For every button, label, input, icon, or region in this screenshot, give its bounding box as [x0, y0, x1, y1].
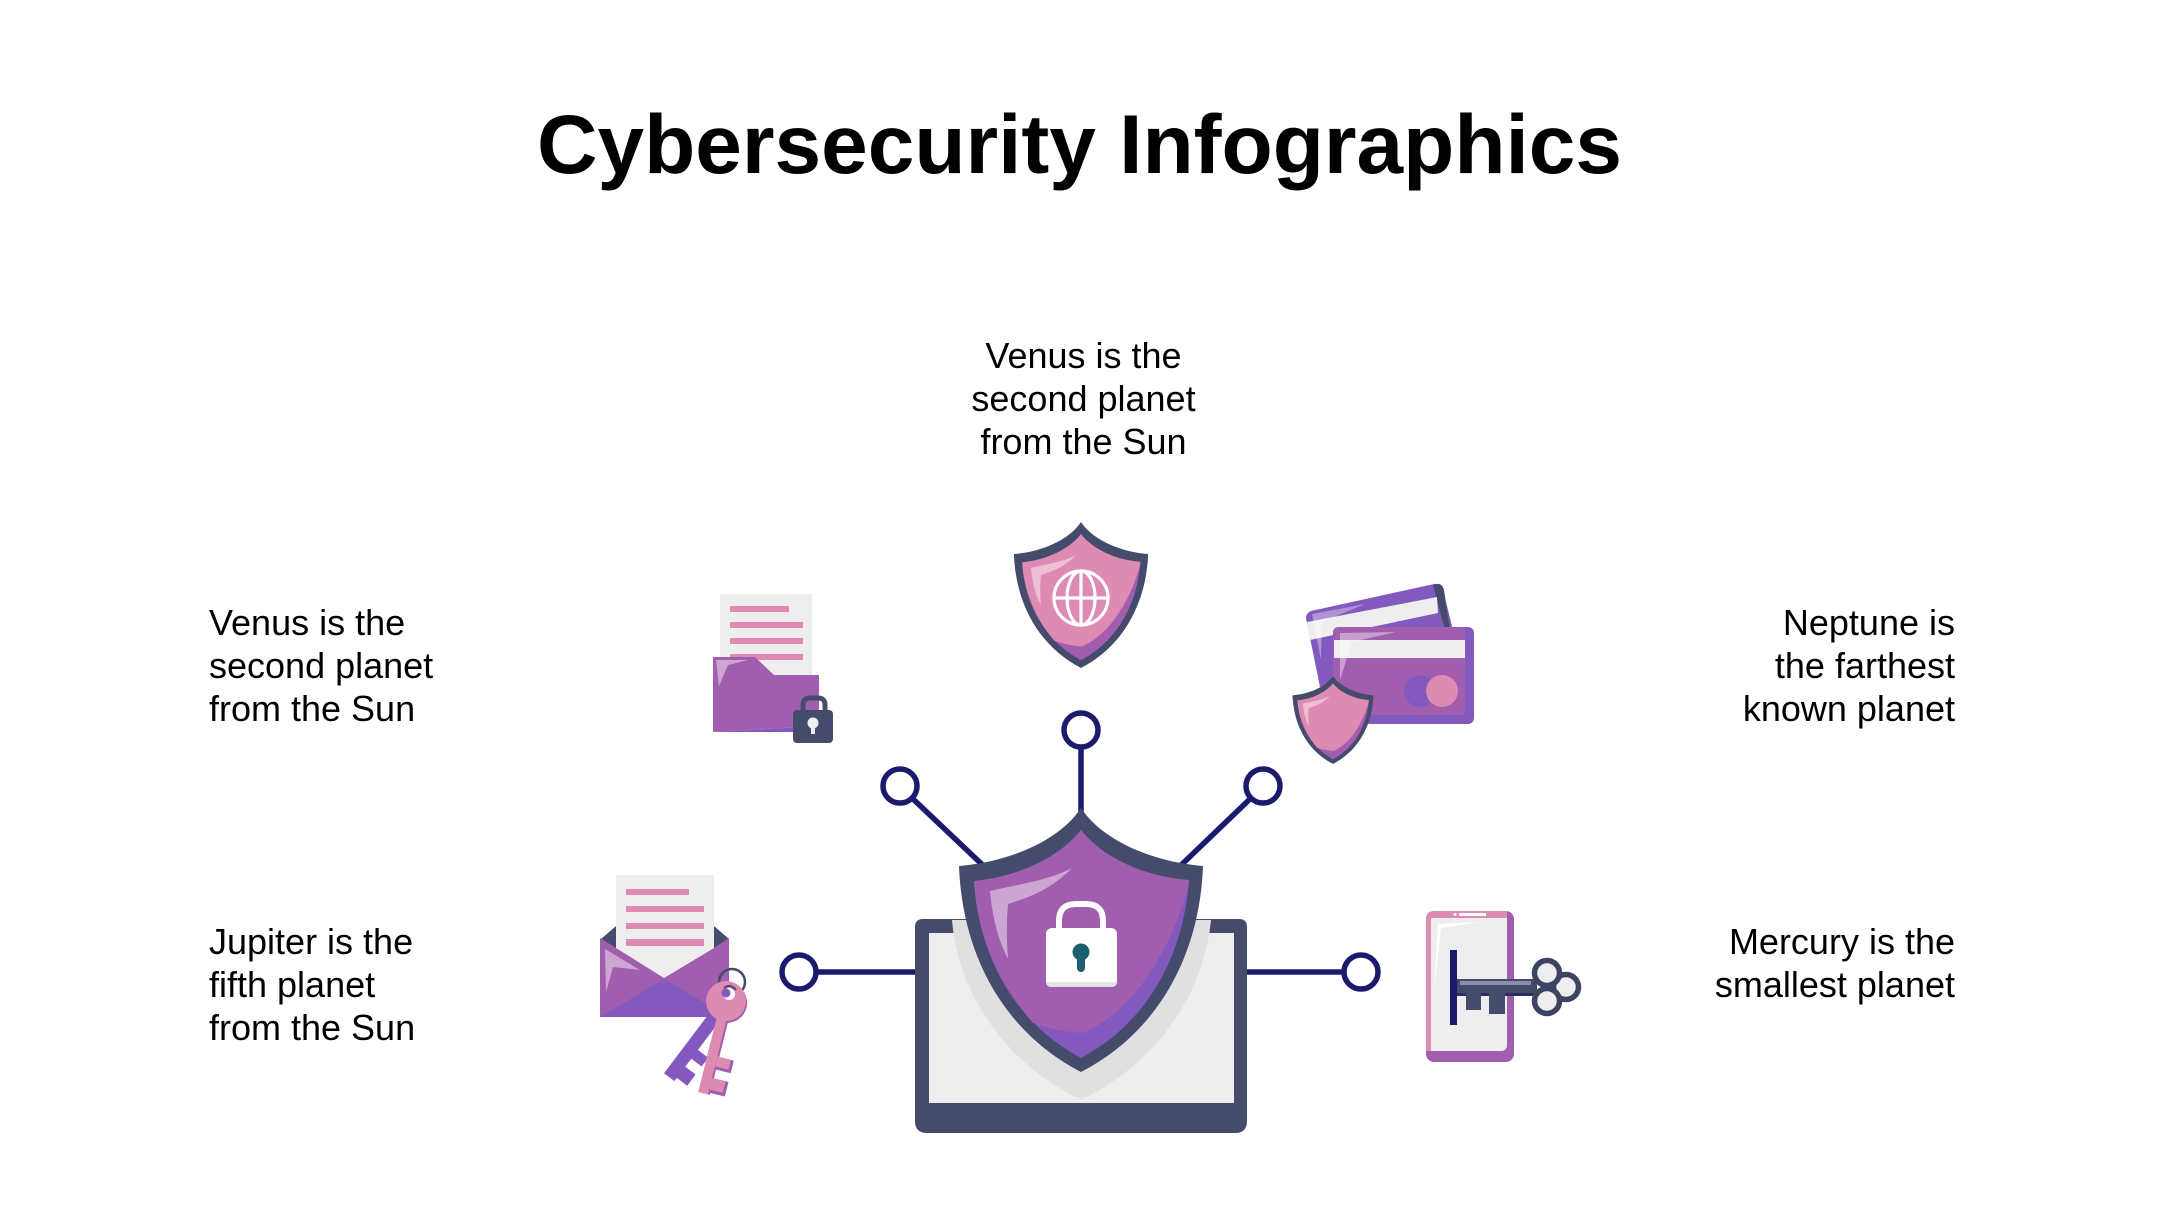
icon: key ring [719, 969, 745, 995]
icon: key hole [722, 986, 736, 1000]
icon: purple key [664, 1005, 736, 1089]
icon: envelope with keys [600, 875, 752, 1099]
text block: top: second planet [971, 378, 1196, 419]
text block: lower right [1715, 921, 1955, 1005]
title: Cybersecurity Infographics [537, 97, 1622, 191]
icon: phone with key [1426, 911, 1578, 1062]
text block: lower left: from the Sun [209, 1007, 415, 1048]
text block: top [971, 335, 1196, 462]
icon: credit cards with shield [1292, 584, 1474, 764]
text block: lower right: Mercury is the [1729, 921, 1955, 962]
laptop [915, 919, 1247, 1133]
text block: upper left [209, 602, 433, 729]
text block: upper left: from the Sun [209, 688, 415, 729]
text block: upper left: Venus is the [209, 602, 405, 643]
text block: upper right: Neptune is [1783, 602, 1955, 643]
text block: upper right: the farthest [1775, 645, 1955, 686]
text block: upper right [1743, 602, 1955, 729]
text block: lower left: fifth planet [209, 964, 375, 1005]
text block: lower right: smallest planet [1715, 964, 1955, 1005]
icon: pink key [684, 977, 752, 1099]
icon: folder with lock [713, 594, 833, 743]
text block: top: from the Sun [980, 421, 1187, 462]
connector nodes [782, 713, 1378, 989]
text block: upper right: known planet [1743, 688, 1955, 729]
text block: upper left: second planet [209, 645, 433, 686]
central shield [952, 808, 1211, 1100]
icon: globe shield [1014, 522, 1148, 668]
text block: lower left [209, 921, 415, 1048]
icon: padlock [1046, 904, 1117, 987]
text block: top: Venus is the [985, 335, 1182, 376]
text block: lower left: Jupiter is the [209, 921, 413, 962]
